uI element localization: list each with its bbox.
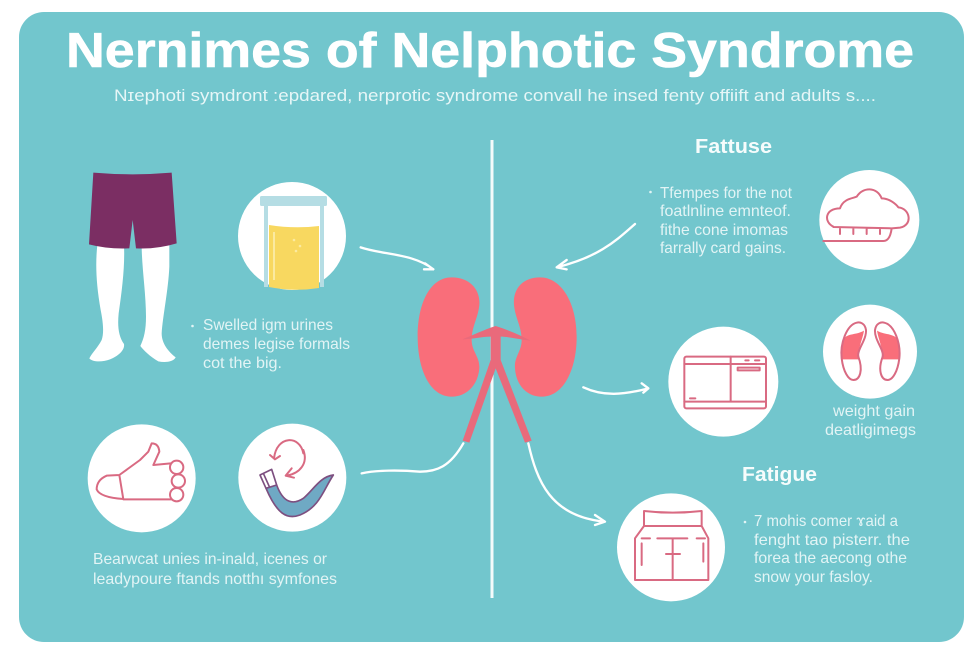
text: Fatigue description: forea the aecong othe xyxy=(754,550,907,567)
title: Nernimes of Nelphotic Syndrome xyxy=(66,24,914,78)
text: Fatigue description xyxy=(744,513,910,586)
arrow: right ureter line xyxy=(528,443,605,525)
text: weight gain: deatligimegs xyxy=(825,422,916,439)
text: Fatigue description: snow your fasloy. xyxy=(754,569,873,586)
icon: swollen hand xyxy=(88,424,196,532)
heading: Fatigue: Fatigue xyxy=(742,464,817,486)
text: Fatigue description: fenght tao pisterr. the xyxy=(754,532,910,549)
text: Fattuse description: farrally card gains. xyxy=(660,240,786,257)
text: Fattuse description xyxy=(649,185,793,257)
icon: legs with shorts xyxy=(89,173,177,362)
icon: tube with circular arrows xyxy=(238,424,346,532)
text: lower-left description: Bearwcat unies in-inald, icenes or xyxy=(93,551,328,568)
icon: kidneys and ureters xyxy=(418,277,577,443)
text: lower-left description: leadypoure ftands notthı symfones xyxy=(93,571,337,588)
arrow: kidney to panel icon xyxy=(583,383,648,394)
icon: shorts outline xyxy=(617,493,725,601)
icon: monitor panel xyxy=(668,327,778,437)
text: swelling description xyxy=(191,317,350,372)
icon: urine sample tube xyxy=(238,182,346,290)
text: swelling description: Swelled igm urines xyxy=(203,317,333,334)
arrow: left ureter line xyxy=(362,443,463,473)
text: swelling description: cot the big. xyxy=(203,355,282,372)
subtitle: Nɪephoti symdront :epdared, nerprotic syndrome convall he insed fenty offiift and adults s.... xyxy=(114,86,876,105)
arrow: urine to kidney xyxy=(361,247,433,269)
text: Fattuse description: fithe cone imomas xyxy=(660,222,788,239)
text: Fattuse description: foatlnline emnteof. xyxy=(660,203,791,220)
text: weight gain: weight gain xyxy=(832,403,915,420)
text: weight gain xyxy=(825,403,916,439)
text: Fatigue description: 7 mohis comer ɤaid a xyxy=(754,513,898,530)
center divider line xyxy=(490,140,494,598)
text: lower-left description xyxy=(93,551,337,588)
icon: cloud xyxy=(819,170,919,270)
heading: Fattuse: Fattuse xyxy=(695,136,772,158)
arrow: fatigue text to kidney xyxy=(557,224,635,269)
icon: feet xyxy=(823,305,917,399)
text: Fattuse description: Tfempes for the not xyxy=(660,185,793,202)
text: swelling description: demes legise formals xyxy=(203,336,350,353)
